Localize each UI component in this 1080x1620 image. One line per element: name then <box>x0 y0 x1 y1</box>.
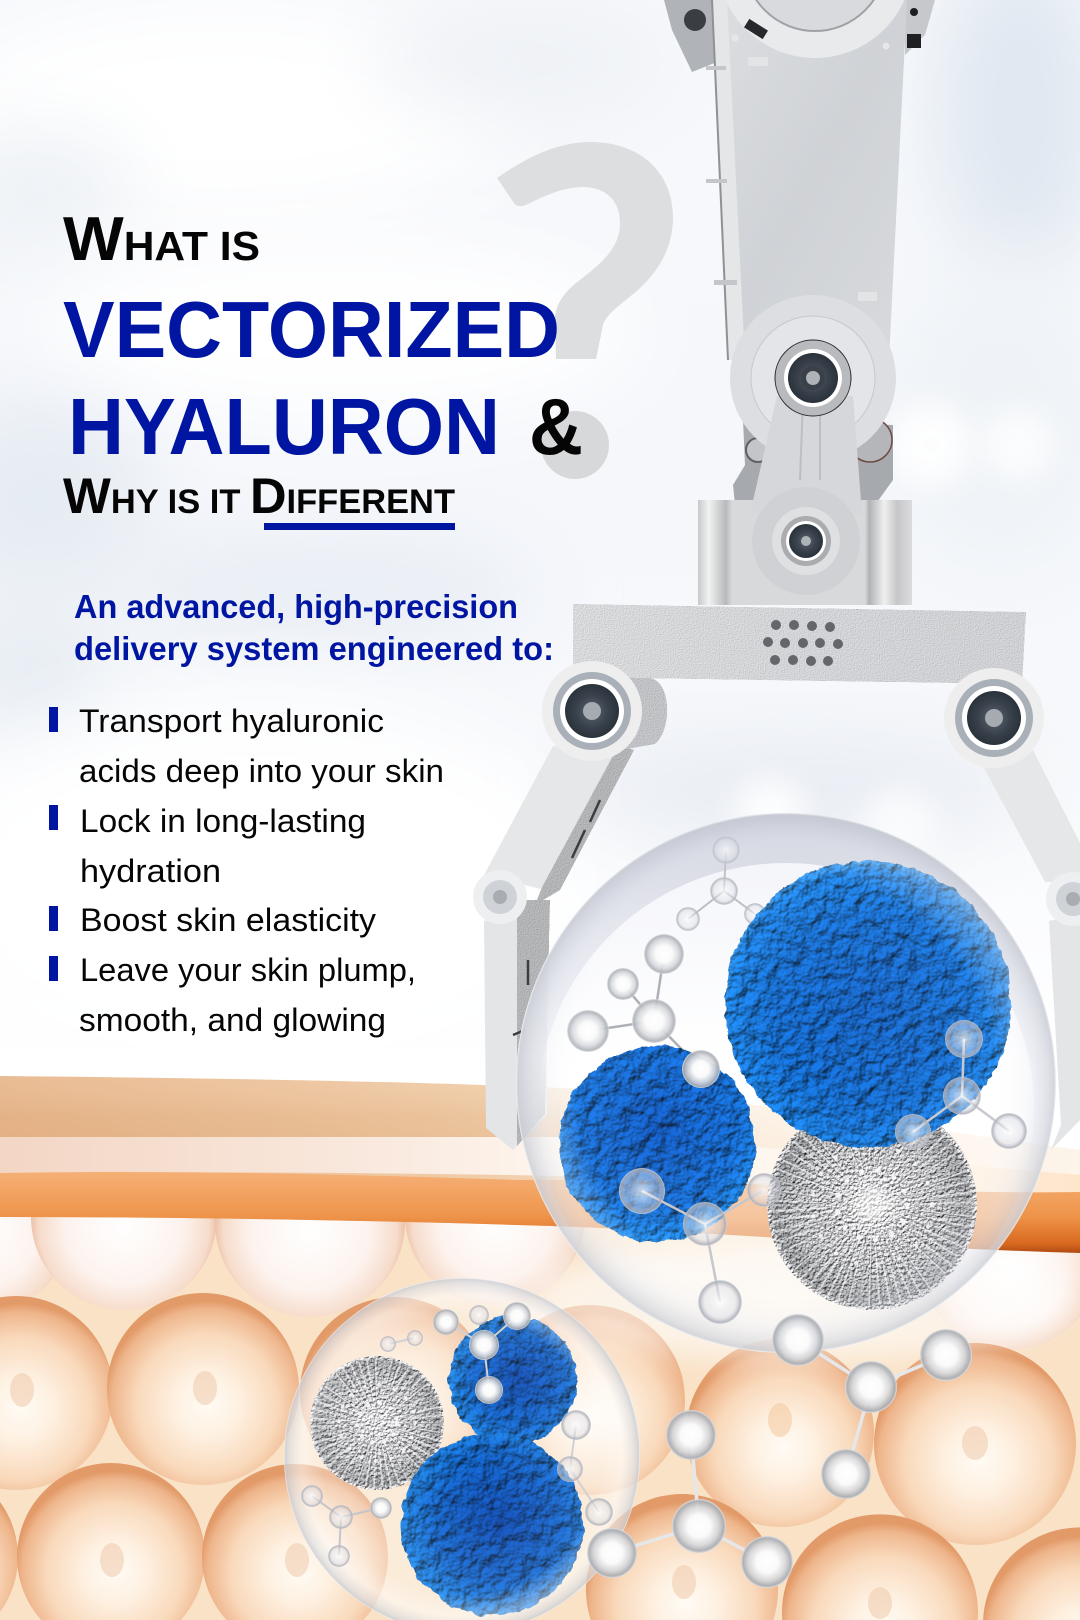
bullet: elasticity: Boost skin elasticity <box>80 902 376 938</box>
cells: middle row <box>0 1293 1076 1545</box>
cells: bottom row <box>0 1463 1080 1620</box>
lower blue sphere <box>401 1433 583 1615</box>
link arm <box>750 396 862 514</box>
title line: Why is it Different: WHY IS IT DIFFERENT <box>63 468 455 524</box>
small grey radial sphere <box>310 1356 444 1490</box>
big blue sphere <box>725 861 1011 1147</box>
left elbow pin <box>473 870 527 924</box>
molecule: right chain <box>895 1020 1027 1150</box>
molecule: side chain <box>557 1410 613 1526</box>
subheading <box>74 588 554 667</box>
molecule: on medium sphere <box>619 1050 781 1324</box>
medium blue sphere <box>559 1046 755 1242</box>
left gripper barrel <box>610 678 667 752</box>
cells: pale top row <box>0 1124 1080 1350</box>
mounting block <box>698 500 912 605</box>
question mark: grey backdrop glyph <box>497 142 673 479</box>
molecule: left chain <box>567 934 701 1069</box>
gears behind link <box>733 418 893 505</box>
title line: Vectorized: VECTORIZED <box>63 285 560 374</box>
bubble body <box>516 813 1056 1353</box>
bullet: hydration: hydration <box>80 853 221 889</box>
subheading: delivery system engineered to: <box>74 630 554 667</box>
cross bar <box>573 604 1026 684</box>
molecule: back chain, faint <box>676 836 766 931</box>
bullet: transport: acids deep into your skin <box>79 753 444 789</box>
title block <box>63 205 583 530</box>
elbow joint <box>730 295 896 461</box>
bullet: transport <box>49 703 444 789</box>
shoulder housing <box>664 0 935 72</box>
title underline <box>264 523 455 530</box>
molecule: lower-centre outside bubbles <box>587 1410 793 1588</box>
white mist behind large bubble <box>530 1240 1070 1360</box>
molecule: upper-right outside bubbles <box>772 1314 972 1499</box>
robot arm <box>473 0 1080 1150</box>
bullet: plump <box>49 952 416 1038</box>
right elbow pin <box>1046 872 1080 926</box>
title line: What is: WHAT IS <box>63 205 260 274</box>
bubble rim <box>516 813 1056 1353</box>
benefit list <box>49 703 444 1038</box>
upper arm plate <box>712 0 907 360</box>
grey radial sphere <box>767 1100 977 1310</box>
molecule: top chain <box>380 1302 531 1404</box>
bubble upper crescent <box>516 813 1056 1353</box>
title line: Hyaluron: HYALURON <box>68 382 500 471</box>
upper blue sphere <box>449 1316 577 1444</box>
right gripper finger <box>984 750 1080 1150</box>
small bubble with molecules and spheres <box>284 1278 640 1620</box>
title ampersand: & <box>529 382 583 471</box>
bullet: transport: Transport hyaluronic <box>79 703 384 739</box>
bullet: hydration: Lock in long-lasting <box>80 803 366 839</box>
subheading: An advanced, high-precision <box>74 588 518 625</box>
left pivot bearing <box>542 661 642 761</box>
large bubble with molecules and spheres <box>516 813 1056 1353</box>
left gripper finger <box>473 740 634 1150</box>
bullet: hydration <box>49 803 366 889</box>
bullet: plump: smooth, and glowing <box>79 1002 386 1038</box>
elbow bearing <box>775 340 851 416</box>
bullet: plump: Leave your skin plump, <box>80 952 416 988</box>
skin layer: cell field <box>0 1124 1080 1620</box>
vent holes <box>763 620 843 666</box>
wrist joint <box>752 487 860 595</box>
right pivot bearing <box>944 668 1044 768</box>
skin surface band <box>0 1076 1080 1253</box>
molecule: lower-left chain <box>301 1485 392 1567</box>
shoulder disc <box>706 0 913 301</box>
small bubble rim <box>284 1278 640 1620</box>
